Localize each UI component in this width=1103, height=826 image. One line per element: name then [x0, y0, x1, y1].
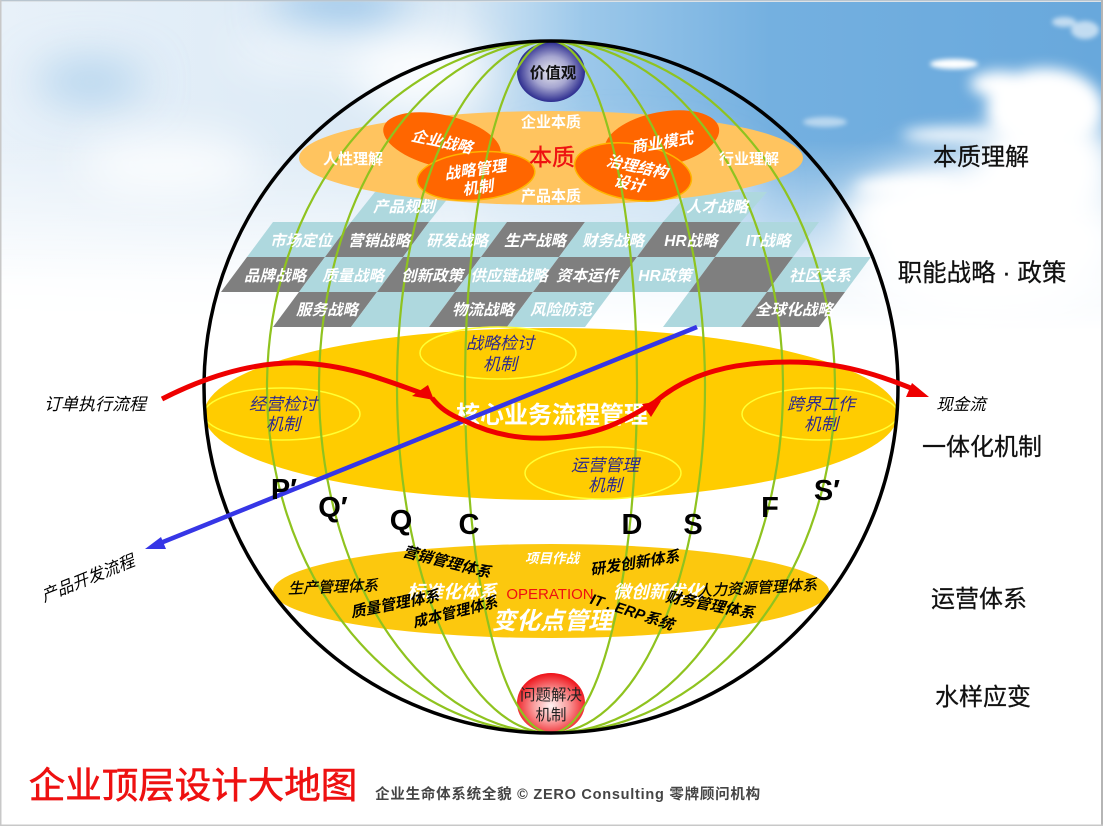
essence labels: 行业理解 [719, 151, 779, 168]
essence labels: 本质 [529, 144, 575, 170]
strategy and policy labels: 产品规划 [373, 198, 437, 216]
layer labels: 本质理解 [933, 144, 1029, 171]
sphere: problem solving: 机制 [535, 706, 567, 724]
operation system labels: 财务管理体系 [664, 589, 757, 623]
strategy and policy labels: 营销战略 [348, 232, 412, 250]
strategy and policy labels: 质量战略 [322, 267, 386, 285]
operation system labels [288, 543, 818, 635]
operation system labels: 人力资源管理体系 [697, 577, 818, 600]
essence labels: 设计 [612, 172, 649, 196]
operation system labels: 质量管理体系 [349, 587, 442, 621]
layer labels: 水样应变 [935, 684, 1031, 711]
operation system labels: 标准化体系 [407, 582, 499, 602]
operation ellipse [273, 544, 829, 638]
mechanism labels: 经营检讨 [249, 395, 319, 414]
layer labels: 运营体系 [931, 586, 1027, 613]
PQCDS letters: P′ [271, 474, 297, 506]
PQCDS letters [271, 474, 840, 541]
strategy and policy labels: 风险防范 [530, 301, 594, 319]
essence labels: 治理结构 [605, 152, 672, 183]
PQCDS letters: Q′ [318, 492, 348, 524]
operation system labels: 生产管理体系 [288, 577, 379, 598]
operation system labels: 微创新优化 [613, 582, 706, 602]
orange ellipse: strategy management [415, 147, 537, 205]
strategy and policy labels: 资本运作 [556, 267, 620, 285]
strategy and policy labels: 服务战略 [296, 301, 360, 319]
mechanism labels: 机制 [266, 415, 303, 434]
strategy and policy labels: 生产战略 [504, 232, 568, 250]
essence labels: 战略管理 [443, 156, 510, 183]
globe outline [204, 41, 898, 733]
arrowheads [412, 383, 929, 417]
mechanism labels: 战略检讨 [466, 334, 536, 353]
strategy and policy labels: 全球化战略 [755, 301, 835, 319]
orange ellipse: enterprise strategy [378, 102, 506, 180]
strategy and policy labels: 研发战略 [426, 232, 490, 250]
function strategy parallelogram grid [221, 192, 871, 327]
operation system labels: 营销管理体系 [401, 543, 493, 582]
strategy and policy labels: HR战略 [664, 232, 720, 250]
strategy and policy labels: IT战略 [746, 232, 793, 250]
strategy and policy labels: 社区关系 [789, 267, 852, 285]
operation system labels: 项目作战 [525, 551, 581, 566]
PQCDS letters: D [622, 509, 642, 541]
essence labels [323, 113, 779, 205]
strategy and policy labels: 物流战略 [452, 301, 516, 319]
sphere: problem solving: 问题解决 [520, 686, 582, 704]
essence labels: 产品本质 [521, 187, 581, 205]
mechanism labels: 核心业务流程管理 [456, 402, 648, 429]
strategy and policy labels: HR政策 [638, 267, 694, 285]
essence ellipse [299, 111, 803, 205]
strategy and policy labels: 创新政策 [401, 267, 465, 285]
flow labels: 现金流 [936, 395, 988, 414]
PQCDS letters: C [459, 509, 480, 541]
sphere: values: 价值观 [530, 64, 577, 82]
strategy and policy labels: 供应链战略 [470, 267, 550, 285]
mechanism labels: 运营管理 [571, 456, 641, 475]
layer labels: 职能战略 · 政策 [898, 259, 1066, 287]
PQCDS letters: F [761, 492, 779, 524]
mechanism labels: 机制 [588, 476, 625, 495]
essence labels: 人性理解 [323, 151, 383, 168]
orange ellipse: governance [570, 135, 696, 209]
globe meridians [267, 41, 835, 733]
layer labels [898, 144, 1066, 711]
essence labels: 商业模式 [630, 129, 697, 157]
flow labels: 产品开发流程 [39, 551, 140, 606]
sphere: values [517, 42, 585, 102]
layer labels: 一体化机制 [922, 434, 1042, 461]
mechanism labels: 机制 [483, 355, 520, 374]
strategy and policy labels: 市场定位 [270, 232, 333, 250]
strategy and policy labels: 品牌战略 [244, 267, 308, 285]
core process ellipse [204, 328, 898, 500]
strategy and policy labels: 人才战略 [686, 198, 750, 216]
operation system labels: 研发创新体系 [589, 548, 682, 579]
mechanism labels: 机制 [804, 415, 841, 434]
mechanism rings [204, 327, 898, 499]
subtitle: 企业生命体系统全貌 © ZERO Consulting 零牌顾问机构 [375, 785, 761, 803]
mechanism labels [249, 334, 858, 495]
essence labels: 机制 [461, 176, 497, 199]
product development flow arrow [145, 327, 697, 549]
mechanism labels: 跨界工作 [787, 395, 858, 414]
flow labels [39, 395, 988, 606]
operation system labels: IT . ERP系统 [588, 591, 679, 635]
operation system labels: OPERATION [506, 586, 594, 603]
operation system labels: 成本管理体系 [411, 593, 501, 631]
PQCDS letters: S′ [814, 475, 840, 507]
flow labels: 订单执行流程 [44, 395, 148, 414]
PQCDS letters: S [683, 509, 703, 541]
essence labels: 企业战略 [410, 127, 476, 158]
strategy and policy labels [244, 198, 852, 319]
strategy and policy labels: 财务战略 [582, 232, 646, 250]
orange ellipse: business model [600, 101, 724, 177]
PQCDS letters: Q [390, 505, 412, 537]
operation system labels: 变化点管理 [492, 608, 616, 635]
title: 企业顶层设计大地图 [29, 765, 357, 806]
sphere: problem solving [517, 673, 585, 733]
essence labels: 企业本质 [521, 113, 581, 131]
order execution flow arrow [162, 362, 918, 438]
